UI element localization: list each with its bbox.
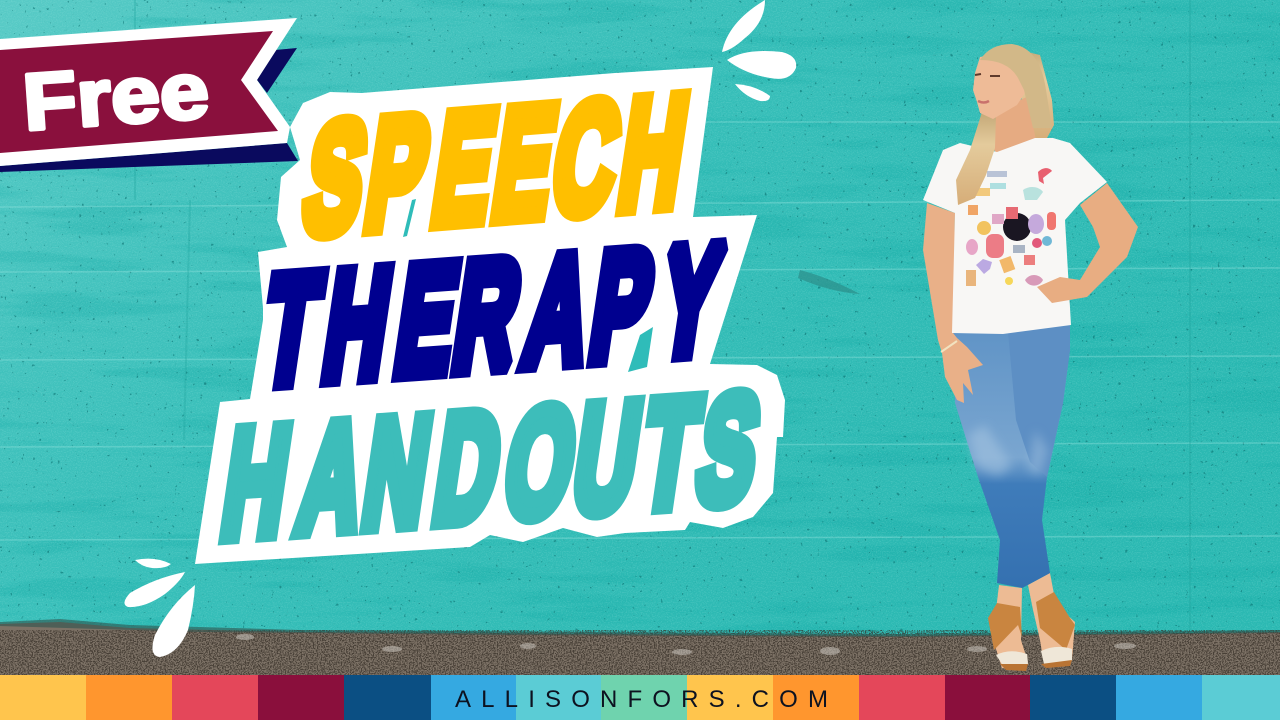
title: HANDOUTS: HANDOUTS	[213, 362, 769, 570]
feet and sandals	[988, 573, 1075, 671]
neck and chest	[986, 97, 1036, 154]
woman photo	[923, 44, 1138, 671]
white t-shirt	[923, 138, 1107, 334]
title: SPEECH: SPEECH	[294, 62, 697, 267]
ribbon fill	[0, 31, 278, 153]
ribbon: Free	[0, 18, 298, 172]
gaps in white backing	[403, 199, 653, 372]
left arm and hand	[923, 203, 983, 403]
facial features	[975, 74, 1000, 102]
color stripe footer	[0, 675, 1280, 720]
right arm and hand	[1037, 183, 1138, 303]
title white backing	[195, 67, 785, 564]
front leg	[953, 326, 1050, 588]
website address: ALLISONFORS.COM	[455, 686, 828, 713]
face	[973, 55, 1025, 119]
ribbon shadow	[0, 48, 298, 172]
ground	[0, 619, 1280, 676]
shirt doodles	[966, 168, 1056, 286]
ribbon outline	[0, 18, 297, 166]
long front hair	[956, 112, 996, 205]
label Free: Free	[20, 45, 212, 147]
splash top right	[722, 0, 796, 101]
back hair	[1010, 48, 1054, 140]
back leg	[990, 340, 1070, 588]
splash bottom left	[124, 559, 195, 657]
title: THERAPY: THERAPY	[253, 213, 731, 417]
hair top	[980, 44, 1052, 128]
